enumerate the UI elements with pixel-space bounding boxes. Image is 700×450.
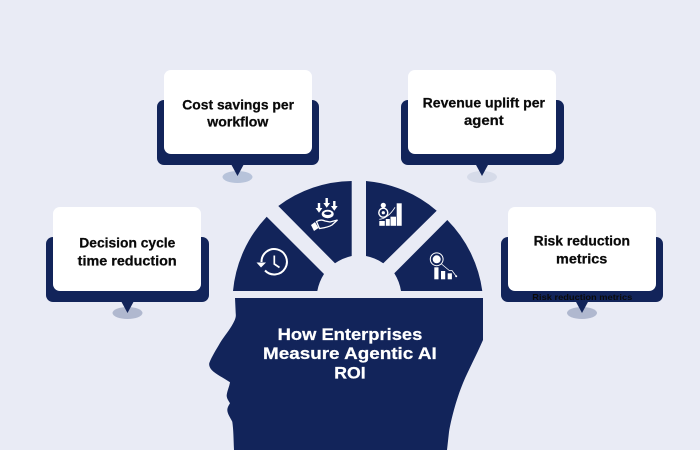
callout text — [423, 95, 546, 128]
callout: risk reduction metrics — [501, 207, 663, 319]
title: How Enterprises — [278, 325, 422, 344]
icon: clock history — [256, 249, 287, 274]
sector: revenue uplift — [366, 181, 437, 263]
callout text: workflow — [206, 115, 269, 130]
icon: hand with coin and arrows — [311, 198, 338, 231]
callout: decision cycle time reduction — [46, 207, 209, 319]
callout text: agent — [464, 113, 504, 128]
callout: revenue uplift per agent — [401, 70, 564, 183]
sector: risk reduction — [394, 220, 482, 291]
callout text: Revenue uplift per — [423, 95, 546, 110]
title: Measure Agentic AI — [263, 344, 437, 363]
title — [263, 325, 437, 382]
callout text: metrics — [556, 251, 607, 266]
callout text: Decision cycle — [79, 236, 176, 250]
callout text: Cost savings per — [182, 97, 295, 112]
icon: coin person with rising bars — [379, 203, 402, 226]
title: ROI — [334, 363, 366, 382]
callout: cost savings per workflow — [157, 70, 319, 183]
icon: magnifier with falling bars — [430, 253, 457, 279]
callout text — [534, 233, 630, 266]
callout text: Risk reduction — [534, 233, 630, 248]
callout text — [182, 97, 295, 130]
sector: cost savings — [278, 181, 352, 263]
head silhouette with title — [209, 298, 483, 450]
sector: time reduction — [233, 217, 324, 291]
overflow caption: Risk reduction metrics — [532, 292, 633, 302]
callout text — [78, 236, 177, 268]
callout text: time reduction — [78, 253, 177, 268]
